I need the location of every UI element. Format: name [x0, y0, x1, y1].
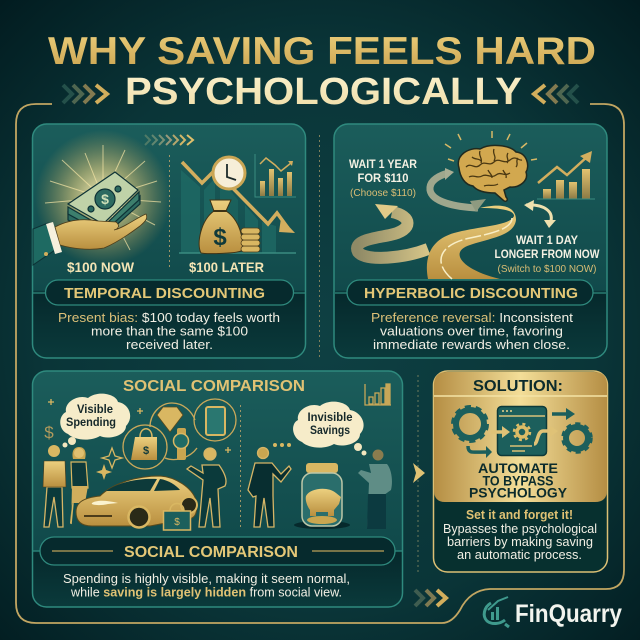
icon: man with hand to chin — [43, 445, 66, 527]
icon: coins — [241, 228, 260, 252]
logo — [484, 597, 622, 628]
label: wait 1 day: (Switch to $100 NOW) — [498, 263, 596, 275]
thought cloud: invisible savings — [293, 402, 366, 456]
thought cloud: invisible savings: Invisible — [308, 410, 353, 424]
arrow: double arrow — [524, 200, 556, 228]
outer gold frame — [16, 104, 624, 623]
icon: money bag — [199, 200, 242, 254]
description: Preference reversal: Inconsistent — [371, 311, 574, 325]
title chevrons right — [534, 85, 578, 103]
icon: shirt cuff and sleeve — [33, 222, 62, 265]
road — [427, 206, 516, 279]
arrows: process flow — [468, 414, 568, 452]
description: valuations over time, favoring — [380, 324, 563, 338]
heading pill: SOCIAL COMPARISON — [124, 544, 298, 561]
icon: stack of money: $ — [101, 191, 109, 207]
icon: glow behind money — [35, 130, 171, 266]
icon: automation window — [498, 406, 546, 456]
description: Set it and forget it! — [466, 508, 573, 522]
description — [58, 311, 280, 352]
thought cloud: visible spending: Visible — [77, 402, 113, 416]
solution headline — [469, 461, 567, 500]
thought cloud: visible spending — [60, 394, 130, 448]
icon: watch — [174, 428, 188, 460]
icon: left gear — [453, 407, 487, 441]
label: wait 1 year: FOR $110 — [358, 173, 408, 185]
panel background — [32, 124, 306, 358]
description: Spending is highly visible, making it seem normal, — [63, 572, 350, 586]
icon: luxury item circles — [123, 399, 236, 469]
description: Present bias: $100 today feels worth — [58, 311, 280, 325]
label: $100 now: $100 NOW — [67, 259, 135, 275]
label: wait 1 day — [494, 235, 600, 275]
vertical divider — [318, 135, 320, 358]
description — [371, 311, 574, 352]
icon: logo mark — [484, 597, 509, 627]
wordmark: FinQuarry — [515, 600, 622, 628]
title: PSYCHOLOGICALLY — [125, 71, 522, 113]
description — [443, 508, 597, 562]
heading pill: HYPERBOLIC DISCOUNTING — [364, 285, 578, 302]
chart: falling value — [179, 162, 296, 253]
panel heading: SOCIAL COMPARISON — [123, 378, 305, 395]
title chevrons left — [63, 85, 107, 103]
solution headline: PSYCHOLOGY — [469, 486, 567, 500]
label: wait 1 day: LONGER FROM NOW — [494, 249, 600, 261]
icon: shopping bag — [131, 429, 157, 460]
panel background — [32, 371, 402, 607]
icon: sparkles — [48, 399, 231, 478]
title: WHY SAVING FEELS HARD — [48, 30, 596, 73]
heading pill — [40, 537, 395, 565]
icon: diamond — [157, 407, 183, 432]
thought cloud: invisible savings: Savings — [310, 423, 350, 437]
description: while saving is largely hidden from social view. — [70, 586, 342, 600]
heading pill — [46, 280, 294, 305]
icon: rising chart — [537, 151, 595, 199]
icon: mini bar chart — [365, 384, 391, 405]
description: barriers by making saving — [447, 535, 593, 549]
solution headline: TO BYPASS — [482, 474, 554, 488]
arrowheads — [486, 408, 575, 458]
icon: man with grey top — [358, 450, 392, 529]
label: wait 1 year: WAIT 1 YEAR — [349, 159, 418, 171]
icon: stack of money — [68, 172, 140, 238]
icon: dollar sign: $ — [44, 423, 54, 442]
header divider — [434, 395, 607, 397]
label: wait 1 year: (Choose $110) — [350, 187, 416, 199]
connector lines — [335, 292, 606, 294]
icon: woman — [70, 447, 88, 524]
connector lines — [33, 292, 305, 294]
panel: hyperbolic discounting — [334, 124, 607, 358]
label: wait 1 day: WAIT 1 DAY — [516, 235, 578, 247]
divider — [240, 405, 242, 530]
arrow: to solution — [413, 463, 425, 483]
panel background — [334, 124, 607, 358]
description: received later. — [126, 338, 213, 352]
icon: right gear — [563, 424, 591, 452]
heading pill — [347, 280, 593, 305]
icon: clock — [213, 157, 245, 189]
icon: hand — [55, 214, 147, 249]
arrow: winding path left — [357, 204, 428, 258]
solution headline: AUTOMATE — [478, 461, 558, 476]
arrow: faded path to brain — [430, 168, 486, 212]
icon: man gesturing — [187, 448, 226, 527]
description: an automatic process. — [457, 548, 582, 562]
panel background — [434, 371, 608, 572]
panel: solution — [434, 371, 608, 572]
title — [48, 30, 596, 113]
thought cloud: visible spending: Spending — [66, 415, 116, 429]
connector lines — [33, 550, 402, 552]
icon: dots — [273, 443, 291, 447]
vertical divider — [417, 375, 419, 572]
icon: brain — [445, 131, 537, 201]
label: $100 later: $100 LATER — [189, 259, 264, 275]
icon: briefcase: $ — [174, 517, 180, 528]
description: more than the same $100 — [91, 324, 248, 338]
icon: piggy bank jar — [294, 463, 350, 529]
icon: mini bar chart — [255, 154, 296, 197]
divider — [168, 155, 170, 270]
heading: SOLUTION: — [473, 378, 563, 395]
icon: briefcase — [164, 504, 190, 530]
panel: temporal discounting — [32, 124, 306, 358]
description: Bypasses the psychological — [443, 522, 597, 536]
panel: social comparison — [32, 371, 402, 607]
icon: money bag: $ — [213, 224, 227, 251]
description: immediate rewards when close. — [373, 338, 570, 352]
icon: shopping bag: $ — [143, 445, 149, 457]
panel chevrons — [145, 135, 193, 145]
gold header area — [434, 372, 607, 502]
label: wait 1 year — [349, 159, 418, 199]
icon: gold car — [76, 476, 197, 528]
icon: tablet — [206, 407, 225, 435]
description — [63, 572, 350, 600]
bottom chevrons — [415, 590, 446, 606]
icon: man with open hand — [248, 448, 291, 527]
heading pill: TEMPORAL DISCOUNTING — [64, 285, 265, 302]
